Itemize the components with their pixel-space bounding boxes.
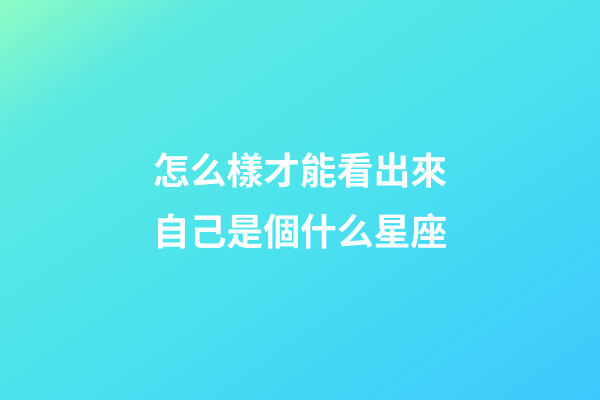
title — [153, 151, 447, 253]
title line 1: 怎么樣才能看出來 — [153, 151, 447, 192]
title line 2: 自己是個什么星座 — [153, 212, 447, 253]
